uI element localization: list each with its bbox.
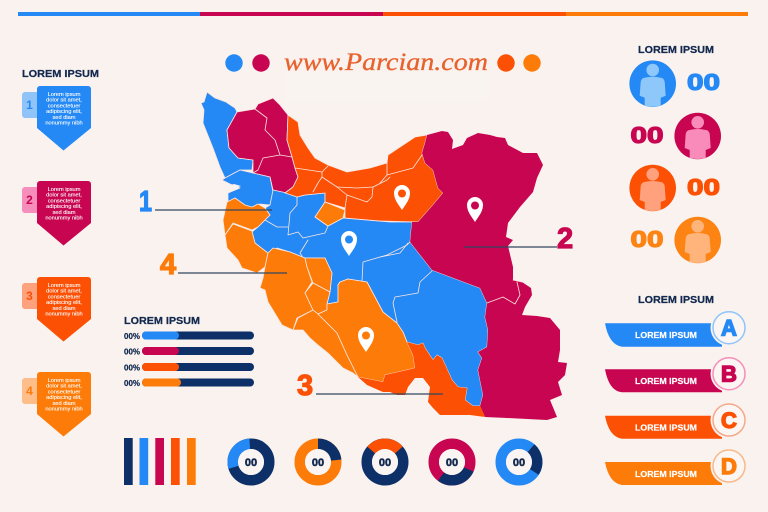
card 1: consectetuer <box>48 103 80 109</box>
region: orange coastal <box>293 310 358 377</box>
bar chart: 00% <box>124 364 140 372</box>
donut 1: 00 <box>245 457 257 469</box>
card 1 <box>22 86 91 150</box>
callout 4: 4 <box>160 249 176 281</box>
ribbon C: C <box>721 408 737 433</box>
region: orange small north <box>305 258 332 292</box>
card 4: 4 <box>26 384 33 398</box>
card 2: dolor sit amet, <box>46 193 82 199</box>
callout 1: 1 <box>139 186 152 218</box>
card 1: dolor sit amet, <box>46 98 82 104</box>
person 2 <box>630 113 721 159</box>
card 3: dolor sit amet, <box>46 289 82 295</box>
person 1: 00 <box>687 69 720 95</box>
map of Iran <box>201 92 567 420</box>
bar chart <box>124 315 254 388</box>
card 3: nonummy nibh <box>45 312 83 318</box>
card 4: dolor sit amet, <box>46 384 82 390</box>
top colour bar <box>18 12 748 16</box>
donut 2 <box>300 438 341 480</box>
person 2: 00 <box>630 122 664 148</box>
donut 4: 00 <box>446 457 458 469</box>
panel: lettered ribbons <box>605 294 748 485</box>
person 3 <box>629 165 720 211</box>
heading: LOREM IPSUM <box>638 294 714 306</box>
region: orange west middle <box>225 224 268 273</box>
card 3: 3 <box>26 289 33 303</box>
card 4: sed diam <box>52 401 76 407</box>
bar chart: 00% <box>124 379 140 388</box>
ribbon A: LOREM IPSUM <box>635 331 697 340</box>
card 4: nonummy nibh <box>45 406 83 412</box>
callout 1 <box>139 186 272 218</box>
card 3: adipiscing elit, <box>46 300 82 306</box>
card 2: 2 <box>26 193 33 207</box>
card 2 <box>22 181 91 246</box>
region: orange small south <box>305 283 330 314</box>
title: website with coloured dots <box>225 49 541 102</box>
donut 4 <box>434 444 474 486</box>
callout 3: 3 <box>297 370 313 402</box>
ribbon D: D <box>721 454 737 479</box>
donut 5: 00 <box>513 457 525 469</box>
ribbon C <box>605 402 748 439</box>
pin: east <box>467 197 483 222</box>
card 2: sed diam <box>52 210 76 216</box>
region borders <box>253 109 522 322</box>
region: crimson north-west <box>227 98 298 193</box>
card 3: consectetuer <box>48 294 80 300</box>
pin: centre <box>341 231 357 256</box>
card 1: nonummy nibh <box>45 120 83 126</box>
region: orange south-west large <box>260 248 313 330</box>
ribbon B <box>605 355 748 392</box>
panel: people statistics <box>629 44 721 263</box>
callout 2: 2 <box>557 223 573 255</box>
card 3: Lorem ipsum <box>48 283 81 289</box>
ribbon B: B <box>721 362 737 386</box>
title: website with coloured dots: www.Parcian.com <box>284 49 488 76</box>
ribbon D: LOREM IPSUM <box>635 470 697 479</box>
region: blue west band <box>222 170 273 208</box>
region: small orange centre <box>315 202 345 226</box>
card 2: nonummy nibh <box>45 216 83 222</box>
card 4: Lorem ipsum <box>48 378 81 384</box>
ribbon C: LOREM IPSUM <box>635 424 697 432</box>
card 4: adipiscing elit, <box>46 395 82 401</box>
card 1: 1 <box>26 98 33 112</box>
region: orange west north <box>223 198 270 235</box>
ribbon D <box>605 448 748 485</box>
region: orange-red south <box>358 342 485 417</box>
card 4: consectetuer <box>48 389 80 395</box>
ribbon B: LOREM IPSUM <box>635 377 697 386</box>
pin: south <box>358 327 374 352</box>
card 4 <box>22 372 91 436</box>
card 1: Lorem ipsum <box>48 92 81 98</box>
pin: north <box>394 185 410 210</box>
donut 5 <box>501 444 542 480</box>
donut 2: 00 <box>312 457 324 469</box>
person 3: 00 <box>687 174 720 200</box>
ribbon A: A <box>721 316 737 340</box>
region: crimson east <box>410 131 567 420</box>
donut 3: 00 <box>379 457 391 469</box>
colour columns <box>124 438 196 485</box>
person 4: 00 <box>630 226 664 252</box>
heading: LOREM IPSUM <box>638 44 714 56</box>
donut 1 <box>227 438 269 480</box>
card 2: Lorem ipsum <box>48 187 81 193</box>
lake <box>227 184 241 189</box>
person 4 <box>630 217 721 263</box>
card 1: adipiscing elit, <box>46 109 82 115</box>
panel: left numbered cards <box>22 68 99 436</box>
card 3 <box>22 277 91 342</box>
card 1: sed diam <box>52 115 76 121</box>
person 1 <box>629 60 720 107</box>
region: orange-red north <box>285 115 443 222</box>
callout 2 <box>464 223 573 255</box>
bar chart: 00% <box>124 348 140 356</box>
card 2: consectetuer <box>48 198 80 204</box>
card 2: adipiscing elit, <box>46 204 82 210</box>
ribbon A <box>605 309 748 347</box>
card 3: sed diam <box>52 306 76 312</box>
region: blue central and east <box>252 190 488 406</box>
heading: LOREM IPSUM <box>22 68 99 80</box>
region: orange south large <box>318 279 415 382</box>
callout 4 <box>160 249 287 281</box>
heading: LOREM IPSUM <box>124 315 200 327</box>
region: blue north-west <box>201 92 253 178</box>
bar chart: 00% <box>124 332 140 341</box>
donut 3 <box>367 439 403 480</box>
